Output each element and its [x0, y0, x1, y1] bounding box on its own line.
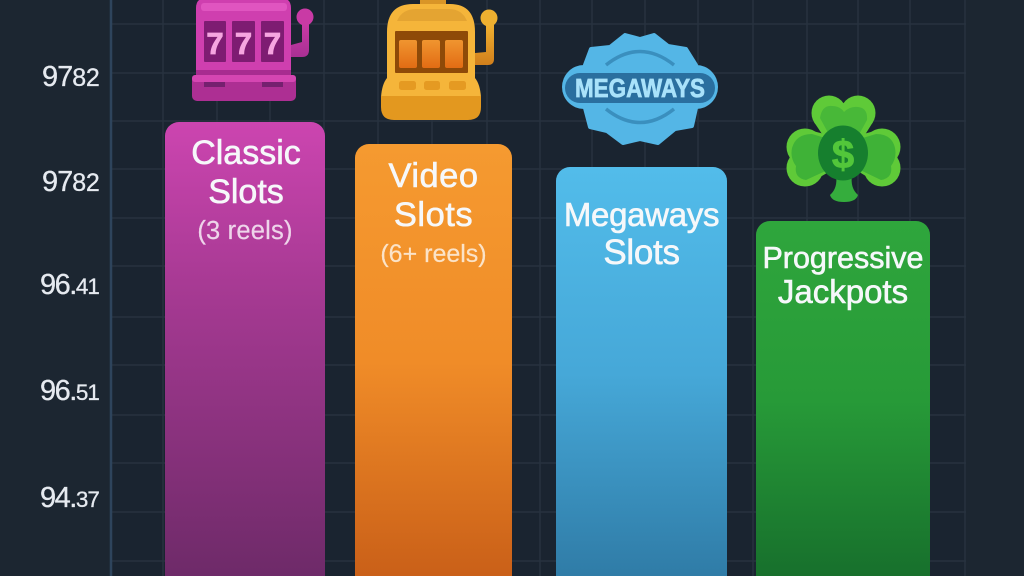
bar: Classic Slots: (3 reels)	[197, 217, 293, 245]
axis value 94.37: 94.37	[40, 482, 99, 514]
icon: shamrock with dollar: $	[832, 133, 854, 177]
right lobe	[856, 128, 900, 186]
top lobe	[812, 96, 876, 146]
bar: Classic Slots	[165, 122, 325, 576]
axis value 96.51: 96.51	[40, 375, 99, 407]
left lobe	[786, 128, 832, 186]
icon: video slot machine	[381, 0, 498, 120]
axis value 97.82: 9782	[42, 166, 99, 198]
bar: Megaways Slots	[556, 167, 727, 576]
bar: Video Slots: Video	[388, 157, 479, 195]
icon: classic slot machine: 7	[264, 26, 281, 61]
bar: Classic Slots: Classic	[191, 134, 301, 172]
bar: Classic Slots: Slots	[208, 173, 284, 211]
icon: classic slot machine	[192, 0, 314, 101]
bar: Video Slots: Slots	[394, 196, 473, 234]
bar: Megaways Slots: Slots	[603, 233, 680, 272]
icon: shamrock with dollar	[786, 96, 900, 202]
icon: Megaways badge	[562, 33, 718, 145]
bar: Progressive Jackpots	[756, 221, 930, 576]
bar: Video Slots: (6+ reels)	[380, 240, 487, 268]
axis value 97.82: 9782	[42, 61, 99, 93]
icon: classic slot machine: 7	[235, 26, 252, 61]
bar: Progressive Jackpots: Progressive	[762, 241, 924, 275]
icon: classic slot machine: 7	[206, 26, 224, 61]
bar: Progressive Jackpots: Jackpots	[778, 273, 908, 310]
bar: Megaways Slots: Megaways	[564, 196, 719, 233]
bar: Video Slots	[355, 144, 512, 576]
axis value 96.41: 96.41	[40, 269, 99, 301]
